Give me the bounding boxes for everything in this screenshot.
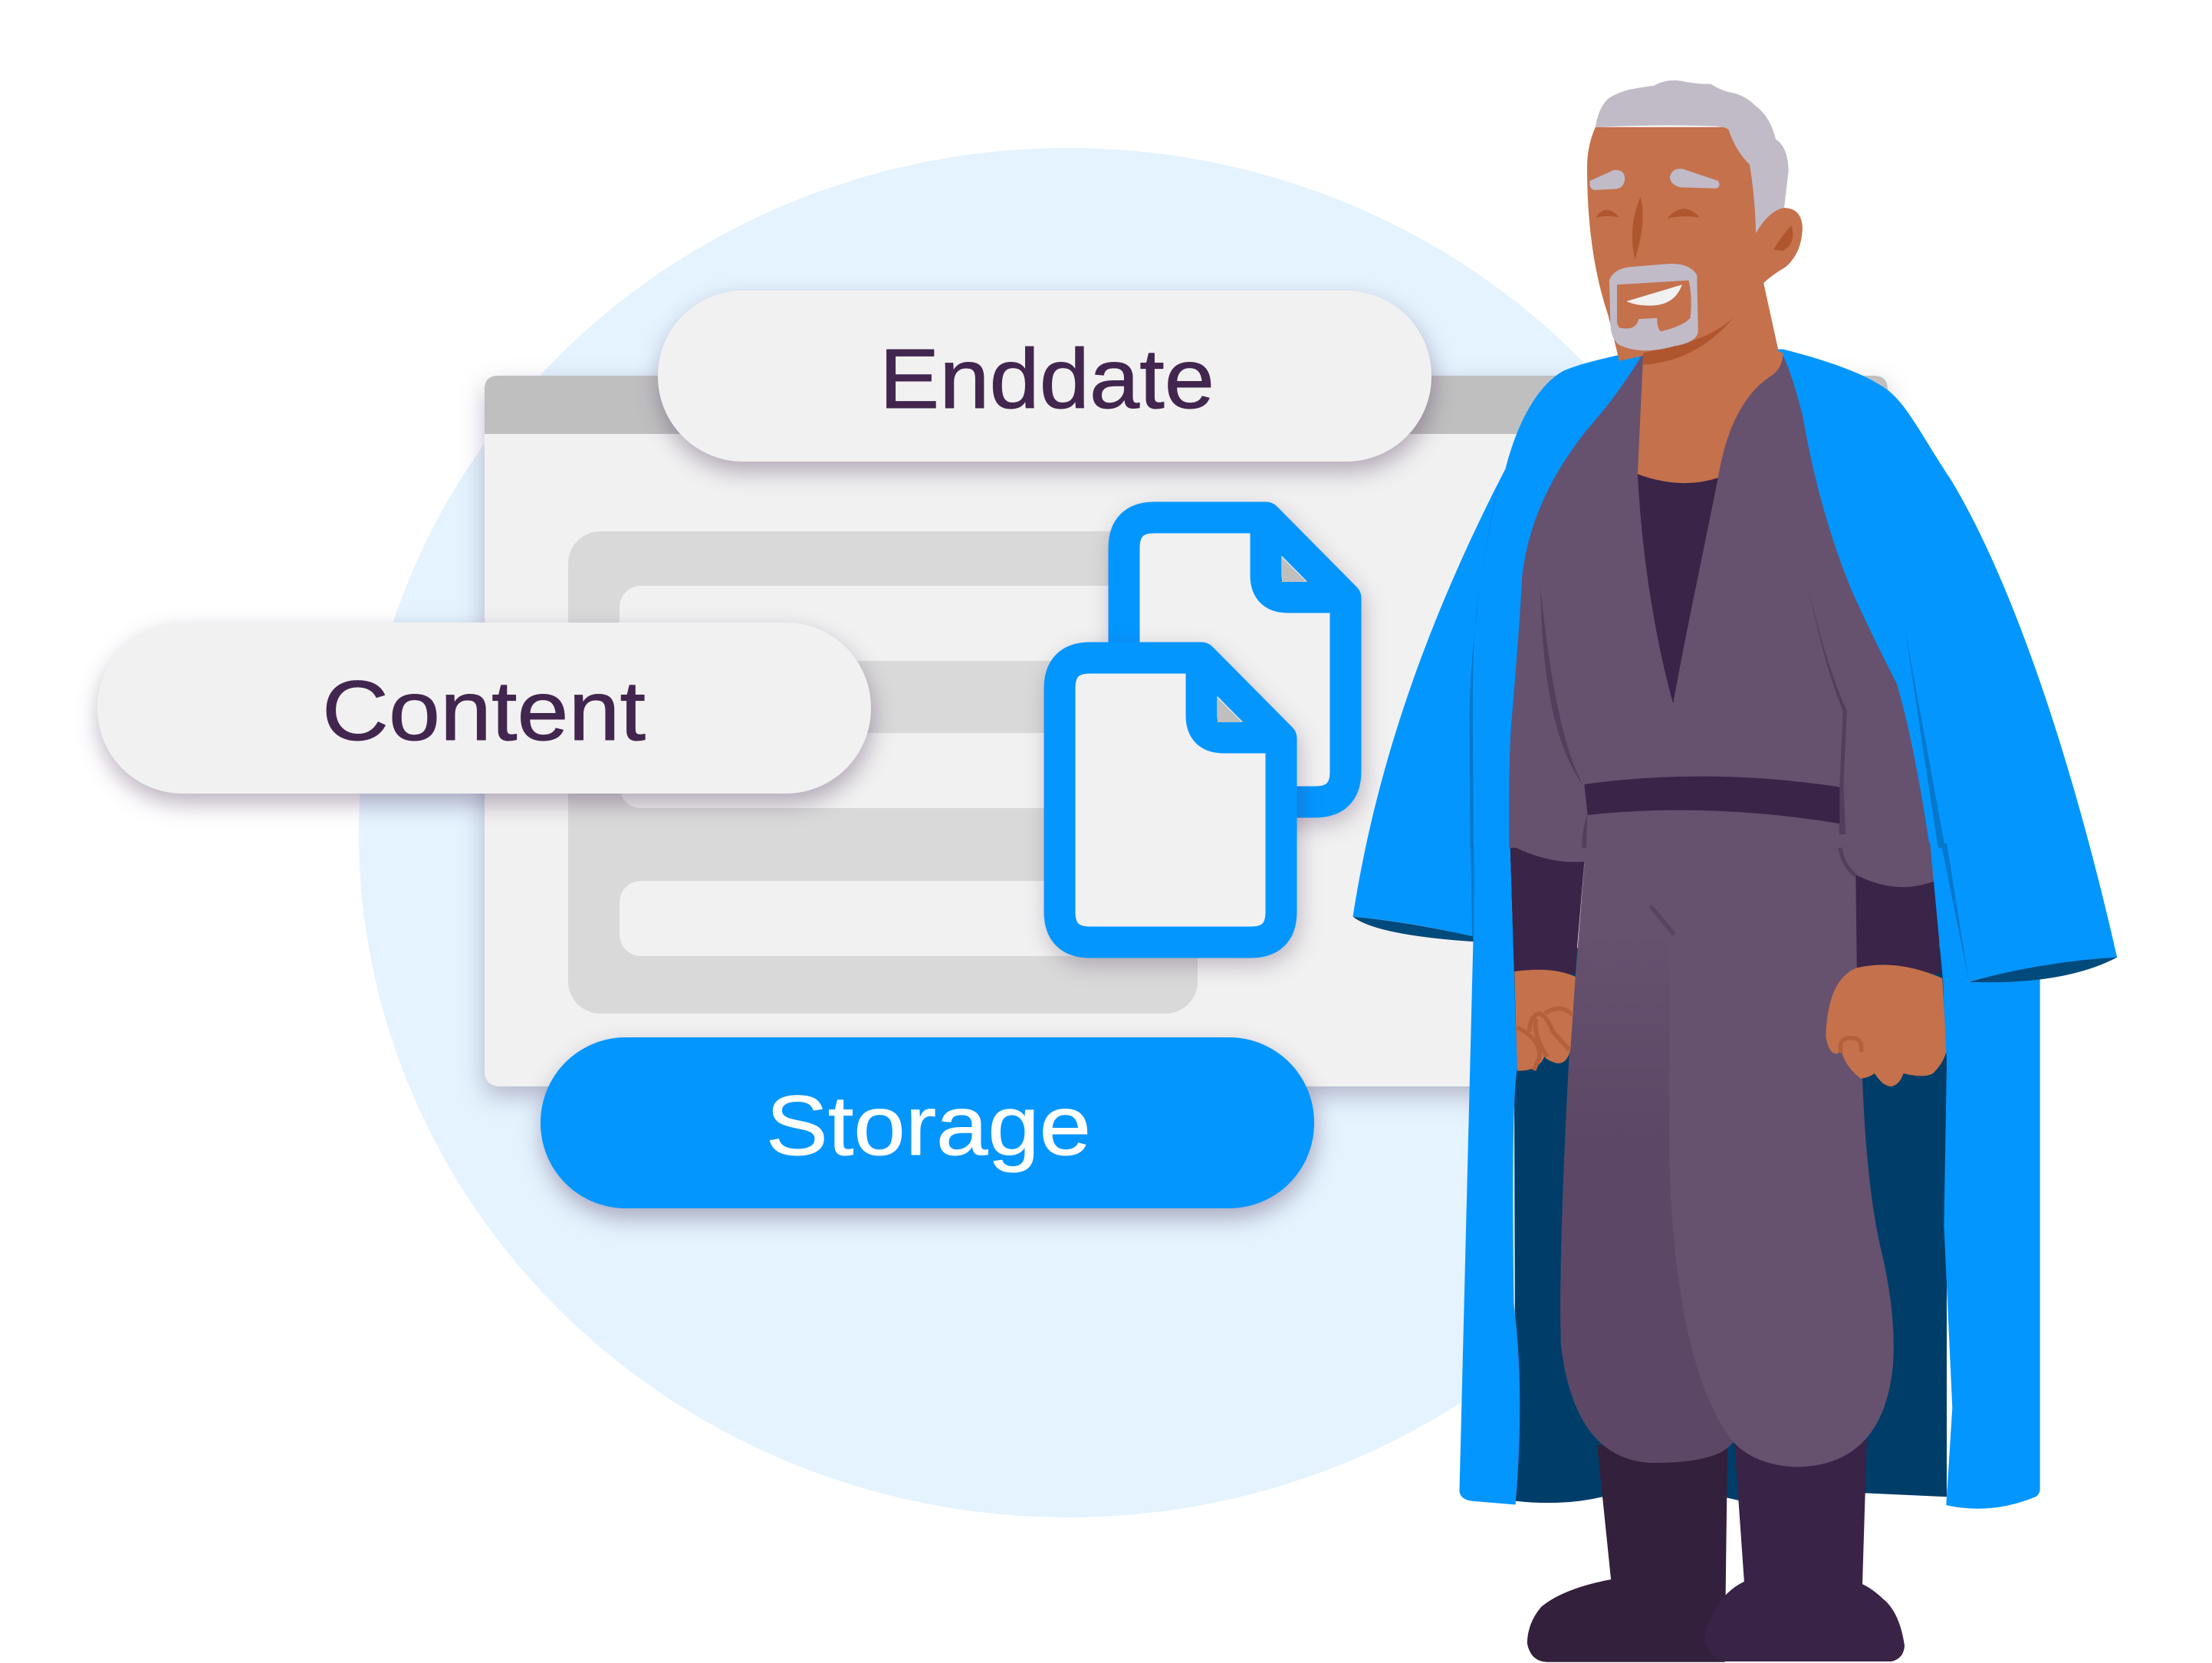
cape left crease [1471, 843, 1474, 936]
cape left sleeve underside [1353, 916, 1474, 942]
pill: Storage: Storage [766, 1079, 1091, 1173]
background circle [359, 148, 1777, 1517]
cape right crease [1905, 630, 1946, 850]
eyebrows [1589, 169, 1720, 190]
cape right crease [1941, 843, 1969, 982]
character: man in blue cape [1353, 81, 2117, 1662]
hair [1596, 81, 1789, 233]
beard [1609, 264, 1698, 350]
cape right front panel [1930, 843, 2040, 1509]
robe lower hem [1510, 843, 1934, 887]
belt [1584, 777, 1839, 823]
character upper body [1469, 81, 1946, 909]
pill: Storage [541, 1037, 1314, 1208]
boot left [1527, 1444, 1727, 1662]
trousers [1560, 843, 1894, 1467]
cape right sleeve underside [1968, 958, 2117, 982]
icon: front document [1060, 658, 1281, 942]
character lower body [1353, 843, 2117, 1662]
icon: rear document [1124, 518, 1346, 802]
teeth [1626, 284, 1682, 306]
robe fold lines [1540, 584, 1847, 863]
trouser left leg shade [1560, 932, 1733, 1463]
mouth area [1617, 281, 1691, 331]
pill: Enddate [658, 291, 1431, 462]
head and neck skin [1587, 127, 1803, 483]
hand right [1826, 965, 1947, 1086]
robe [1509, 356, 1929, 848]
sleeves dark [1510, 843, 1941, 974]
pill: Enddate: Enddate [879, 332, 1214, 426]
undershirt [1638, 474, 1718, 704]
cape silhouette with sleeves [1353, 349, 2117, 981]
boot right [1704, 1439, 1905, 1661]
robe fold lines lower [1839, 843, 1855, 876]
eyes and nose [1596, 197, 1793, 260]
pill: Content [97, 623, 871, 794]
trouser crease [1652, 907, 1673, 933]
panel: application window [485, 376, 1888, 1086]
cape inner lining [1514, 948, 1947, 1503]
pill: Content: Content [322, 664, 646, 758]
hand left [1514, 970, 1576, 1071]
neck shadow [1643, 318, 1733, 365]
cape left crease [1469, 481, 1500, 848]
panel: inner content block [568, 531, 1198, 1014]
cape left front panel [1459, 843, 1520, 1504]
